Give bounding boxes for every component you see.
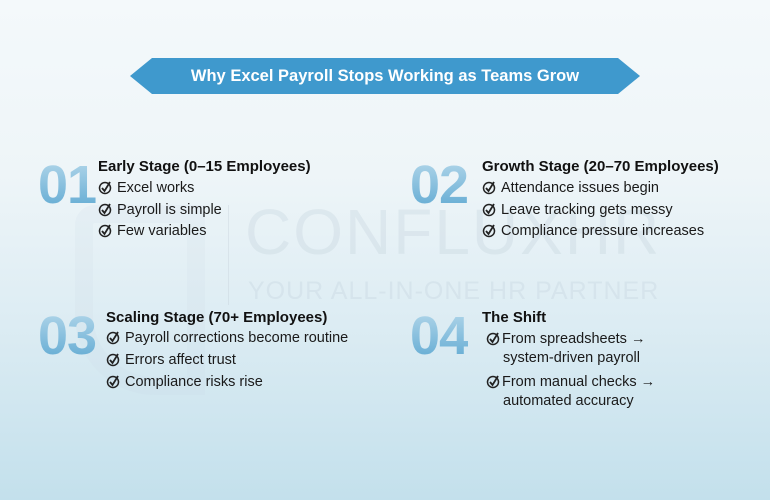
panel: scaling stage [38, 306, 348, 390]
panel: the shift: automated accuracy [503, 393, 634, 409]
panel: growth stage [410, 155, 719, 239]
title banner: Why Excel Payroll Stops Working as Teams Grow [191, 67, 579, 85]
heading: Early Stage (0–15 Employees) [98, 158, 311, 175]
panel: scaling stage: Errors affect trust [125, 352, 236, 368]
number 04: 04 [410, 306, 468, 366]
panel: growth stage: Compliance pressure increases [501, 223, 704, 239]
items: system-driven payroll [503, 350, 640, 366]
panel: scaling stage: Compliance risks rise [125, 374, 263, 390]
panel: early stage: Few variables [117, 223, 206, 239]
items: Payroll corrections become routine [125, 330, 348, 346]
heading: Scaling Stage (70+ Employees) [106, 309, 327, 326]
heading: Growth Stage (20–70 Employees) [482, 158, 719, 175]
number 03: 03 [38, 306, 96, 366]
heading: The Shift [482, 309, 546, 326]
watermark: YOUR ALL-IN-ONE HR PARTNER [248, 277, 659, 305]
number 01: 01 [38, 155, 96, 215]
items: Attendance issues begin [501, 180, 659, 196]
watermark: CONFLUXHR [245, 196, 661, 268]
items [486, 331, 645, 366]
items: Excel works [117, 180, 194, 196]
panel: early stage: Payroll is simple [117, 202, 222, 218]
title banner [130, 58, 640, 94]
items: From spreadsheets → [502, 331, 645, 347]
panel: the shift: From manual checks → [502, 374, 655, 390]
panel: growth stage: Leave tracking gets messy [501, 202, 673, 218]
panel: early stage [38, 155, 311, 239]
panel: the shift [410, 306, 655, 409]
number 02: 02 [410, 155, 468, 215]
